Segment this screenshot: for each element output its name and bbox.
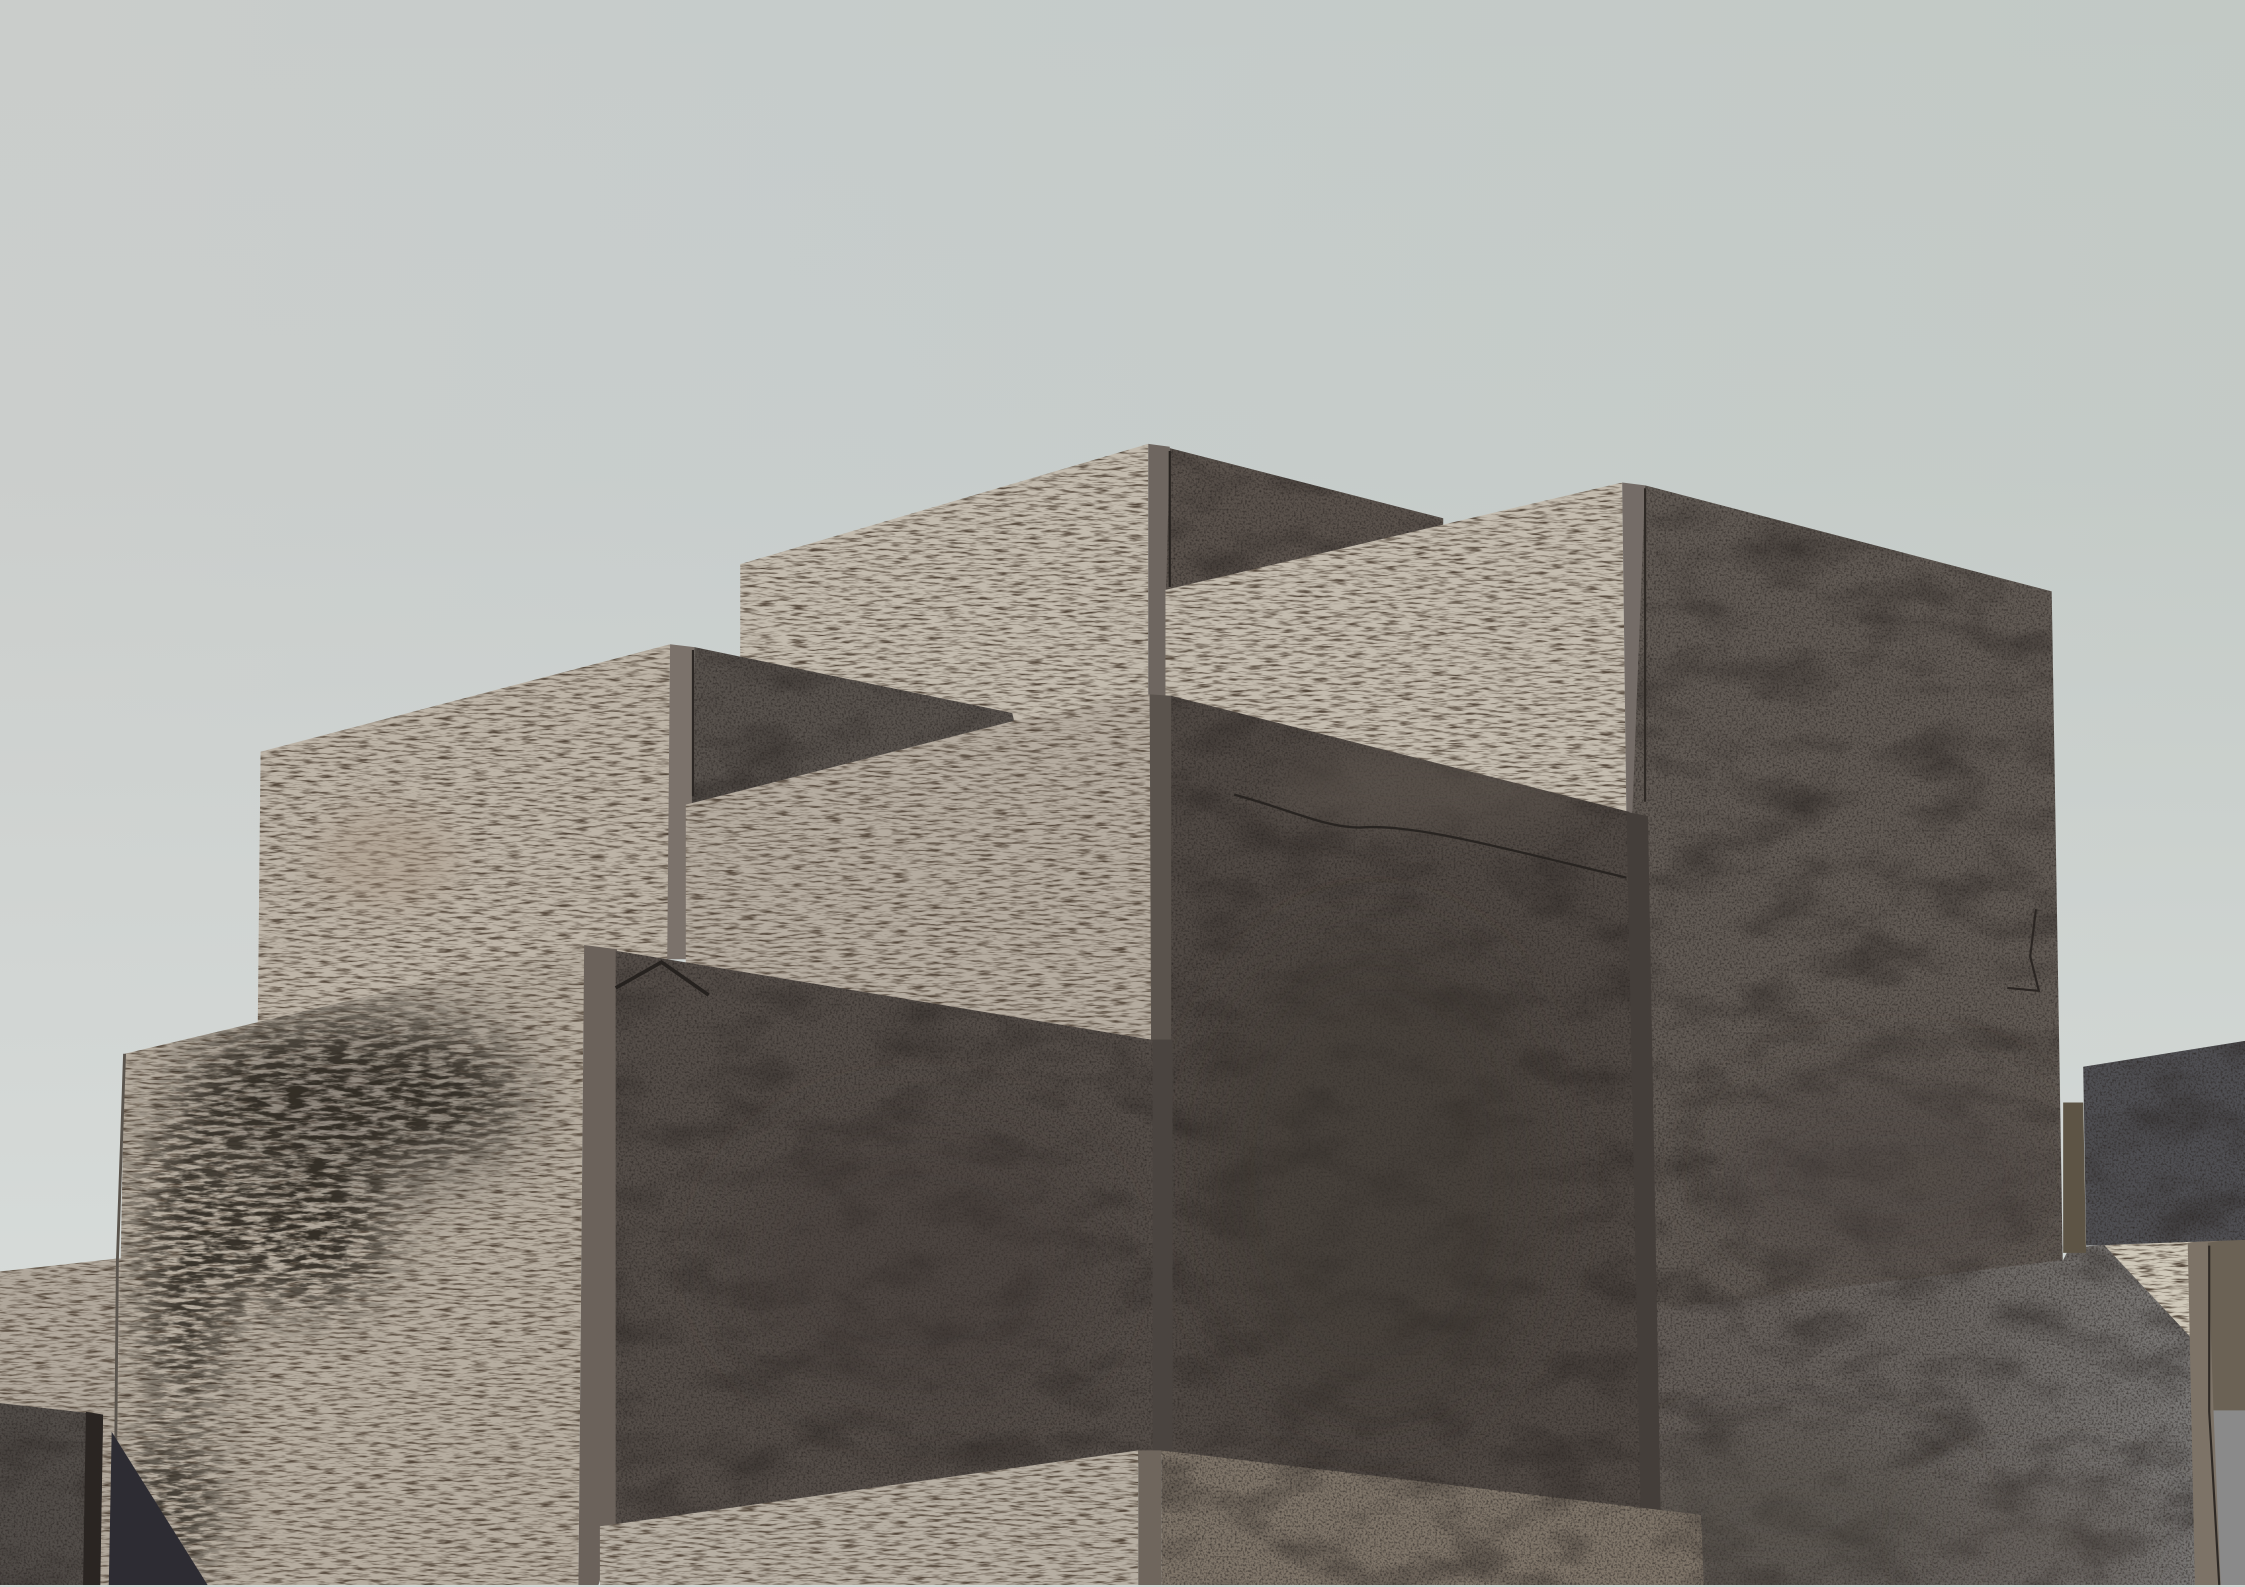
block: bottom centre [600,1450,1704,1585]
block: far back centre [740,444,1443,745]
block: upper right tall [1165,483,2063,1332]
block: upper left [258,644,1019,1031]
block: centre [686,694,1661,1525]
block: front left [115,945,1173,1585]
block: right background [2063,1041,2245,1253]
block: far left foreground [0,1403,208,1585]
block: lower right [1632,1237,2245,1587]
block: far left back face [0,1259,129,1585]
